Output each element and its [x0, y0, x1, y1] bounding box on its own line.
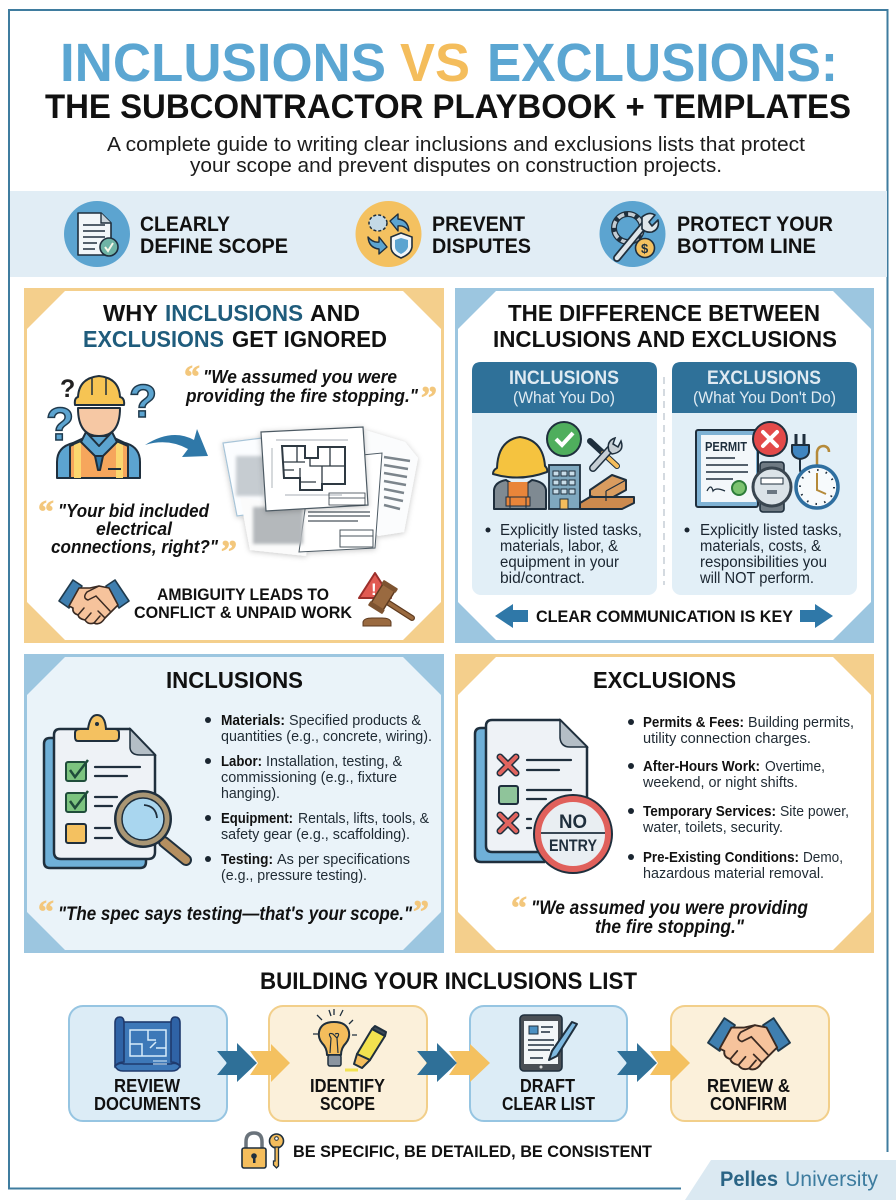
list: inclusions: quantities (e.g., concrete, wiring). [221, 728, 432, 745]
list: exclusions: utility connection charges. [643, 730, 811, 747]
icon: rejected checklist with no entry sign: ENTRY [549, 836, 598, 855]
icon: document with check [64, 201, 130, 267]
icon: rejected checklist with no entry sign [475, 720, 613, 874]
icon: building [549, 465, 580, 509]
list: exclusions: Permits & Fees: [643, 714, 744, 731]
heading: INCLUSIONS [165, 300, 303, 326]
icon: checklist with magnifier [44, 715, 186, 868]
card: inclusions [472, 362, 657, 595]
card: exclusions: EXCLUSIONS [707, 368, 821, 389]
text: exclusion definition: materials, costs, & [700, 538, 822, 555]
quote: fire stopping repeat: “ [511, 889, 527, 925]
callout: clear communication is key [495, 604, 833, 628]
step: identify scope: IDENTIFY [310, 1076, 385, 1096]
icon: confused worker: ? [60, 375, 75, 403]
list: inclusions: Rentals, lifts, tools, & [298, 810, 429, 827]
icon: permit: PERMIT [705, 440, 747, 454]
panel: the difference between inclusions and exclusions [455, 288, 874, 643]
panel: inclusions [24, 654, 444, 953]
heading [83, 300, 387, 352]
list: exclusions: After-Hours Work: [643, 758, 760, 775]
heading: GET IGNORED [232, 326, 387, 352]
brand badge [685, 1160, 896, 1200]
icon: gavel and warning: ! [371, 580, 377, 599]
benefit: protect your bottom line: PROTECT YOUR [677, 213, 833, 236]
quote: electrical connections: electrical [96, 518, 173, 539]
icon: light bulb and highlighter [313, 1009, 386, 1070]
callout: be specific [242, 1133, 653, 1168]
step: draft clear list: DRAFT [520, 1076, 575, 1096]
text: inclusion definition: Explicitly listed tasks, [500, 522, 642, 539]
icon: blueprint [115, 1017, 180, 1071]
text: inclusion definition [486, 522, 642, 587]
panel: why inclusions and exclusions get ignored [24, 288, 444, 643]
icon: handshake [59, 580, 129, 624]
quote: electrical connections: connections, right?" [51, 536, 218, 557]
heading: EXCLUSIONS [83, 326, 224, 352]
step: draft clear list: CLEAR LIST [502, 1094, 595, 1114]
section: building your inclusions list [69, 968, 829, 1121]
quote: electrical connections: “ [38, 493, 54, 529]
list: exclusions: weekend, or night shifts. [642, 774, 798, 791]
heading [493, 300, 837, 352]
step: identify scope: SCOPE [320, 1094, 375, 1114]
list: exclusions: water, toilets, security. [642, 819, 783, 836]
step: draft clear list [470, 1006, 627, 1121]
benefit: protect your bottom line [600, 201, 833, 267]
step: review documents: DOCUMENTS [94, 1094, 201, 1114]
icon: permit [696, 430, 758, 507]
list: inclusions: safety gear (e.g., scaffolding). [221, 826, 410, 843]
icon: wrench and screwdriver [590, 438, 622, 468]
list: inclusions: Materials: [221, 712, 285, 729]
heading: AND [310, 300, 360, 326]
heading: THE DIFFERENCE BETWEEN [508, 300, 820, 326]
subtitle [107, 134, 805, 177]
heading: INCLUSIONS [166, 667, 303, 693]
icon: plug [792, 434, 829, 474]
list: inclusions: Labor: [221, 753, 262, 770]
benefit: protect your bottom line: BOTTOM LINE [677, 235, 816, 258]
card: exclusions: (What You Don't Do) [693, 388, 836, 407]
callout: clear communication is key: CLEAR COMMUNICATION IS KEY [536, 607, 794, 626]
quote: fire stopping: "We assumed you were [203, 366, 397, 387]
text: inclusion definition: materials, labor, & [500, 538, 619, 555]
card: exclusions [672, 362, 857, 595]
step: identify scope [269, 1006, 427, 1121]
list: exclusions: Building permits, [748, 714, 854, 731]
list: inclusions: Equipment: [221, 810, 293, 827]
benefit: prevent disputes: PREVENT [432, 213, 525, 236]
list: inclusions [205, 712, 432, 884]
heading: INCLUSIONS AND EXCLUSIONS [493, 326, 837, 352]
callout: be specific: BE SPECIFIC, BE DETAILED, BE CONSISTENT [293, 1142, 653, 1161]
quote: fire stopping: ” [421, 379, 437, 415]
icon: hard hat [493, 437, 547, 478]
text: inclusion definition: equipment in your [500, 554, 619, 571]
icon: gear wrench and coin [600, 201, 666, 267]
icon: lumber [580, 475, 634, 509]
quote: electrical connections [38, 493, 237, 569]
quote: fire stopping [184, 358, 437, 415]
heading: BUILDING YOUR INCLUSIONS LIST [260, 968, 637, 995]
heading: EXCLUSIONS [593, 667, 736, 693]
subtitle: your scope and prevent disputes on construction projects. [190, 155, 722, 177]
step: review and confirm [671, 1006, 829, 1121]
step: review documents: REVIEW [114, 1076, 180, 1096]
warning text [134, 585, 353, 622]
text: inclusion definition: bid/contract. [500, 570, 585, 587]
heading: WHY [103, 300, 158, 326]
benefit: prevent disputes: DISPUTES [432, 235, 531, 258]
title: VS [400, 33, 470, 93]
list: inclusions: (e.g., pressure testing). [221, 867, 367, 884]
subtitle: A complete guide to writing clear inclusions and exclusions lists that protect [107, 134, 805, 156]
quote: spec says testing: ” [413, 893, 429, 929]
icon: tablet and pen [520, 1015, 577, 1071]
text: exclusion definition: Explicitly listed tasks, [700, 522, 842, 539]
brand badge: Pelles [720, 1168, 778, 1191]
title: INCLUSIONS [60, 33, 386, 93]
list: exclusions: hazardous material removal. [643, 865, 824, 882]
quote: fire stopping repeat: "We assumed you were providing [531, 898, 808, 919]
benefit: prevent disputes [356, 201, 531, 267]
panel: exclusions [455, 654, 874, 953]
title: THE SUBCONTRACTOR PLAYBOOK + TEMPLATES [45, 88, 851, 126]
arrows between steps [217, 1043, 690, 1082]
list: inclusions: Specified products & [289, 712, 421, 729]
arrow: worker to documents [145, 429, 208, 457]
icon: worker [494, 480, 546, 509]
brand badge: University [785, 1168, 878, 1191]
illustration: drawing documents [223, 427, 418, 556]
icon: confused worker [46, 375, 157, 478]
warning text: AMBIGUITY LEADS TO [157, 585, 329, 604]
icon: arrows and shield [356, 201, 422, 267]
list: exclusions: Temporary Services: [643, 803, 776, 820]
list: exclusions: Overtime, [765, 758, 825, 775]
icon: confused worker: ? [129, 375, 157, 427]
benefits band [10, 191, 887, 277]
icon: gear wrench and coin: $ [641, 241, 649, 256]
quote: spec says testing: “ [38, 893, 54, 929]
list: exclusions: Pre-Existing Conditions: [643, 849, 799, 866]
list: exclusions: Demo, [803, 849, 843, 866]
benefit: clearly define scope: CLEARLY [140, 213, 230, 236]
card: inclusions: INCLUSIONS [509, 368, 619, 389]
text: exclusion definition: will NOT perform. [699, 570, 814, 587]
icon: handshake [708, 1018, 790, 1069]
step: review documents [69, 1006, 227, 1121]
quote: spec says testing [38, 893, 429, 929]
list: inclusions: commissioning (e.g., fixture [221, 769, 397, 786]
benefit: clearly define scope: DEFINE SCOPE [140, 235, 288, 258]
step: review and confirm: CONFIRM [710, 1094, 787, 1114]
step: review and confirm: REVIEW & [707, 1076, 790, 1096]
title: EXCLUSIONS: [487, 33, 838, 93]
icon: utility meter [753, 462, 791, 512]
warning text: CONFLICT & UNPAID WORK [134, 603, 353, 622]
text: exclusion definition: responsibilities you [700, 554, 827, 571]
icon: rejected checklist with no entry sign: NO [559, 812, 587, 833]
list: inclusions: Installation, testing, & [266, 753, 402, 770]
card: inclusions: (What You Do) [513, 388, 615, 407]
quote: electrical connections: "Your bid included [58, 500, 210, 521]
icon: red cross [753, 422, 787, 456]
quote: fire stopping: providing the fire stopping." [185, 385, 418, 406]
list: exclusions: Site power, [780, 803, 849, 820]
icon: lock and key [242, 1133, 284, 1168]
text: exclusion definition [684, 522, 842, 587]
quote: fire stopping: “ [184, 358, 200, 394]
icon: green check [547, 422, 581, 456]
icon: gavel and warning [359, 573, 412, 626]
quote: electrical connections: ” [221, 533, 237, 569]
list: inclusions: Testing: [221, 851, 273, 868]
quote: fire stopping repeat [511, 889, 808, 938]
title [45, 33, 851, 126]
list: inclusions: As per specifications [277, 851, 410, 868]
quote: fire stopping repeat: the fire stopping." [595, 917, 745, 938]
list: exclusions [628, 714, 854, 882]
list: inclusions: hanging). [221, 785, 280, 802]
icon: confused worker: ? [46, 398, 74, 450]
benefit: clearly define scope [64, 201, 288, 267]
divider [663, 377, 665, 585]
quote: spec says testing: "The spec says testing—that's your scope." [58, 904, 413, 925]
icon: clock [796, 466, 838, 508]
